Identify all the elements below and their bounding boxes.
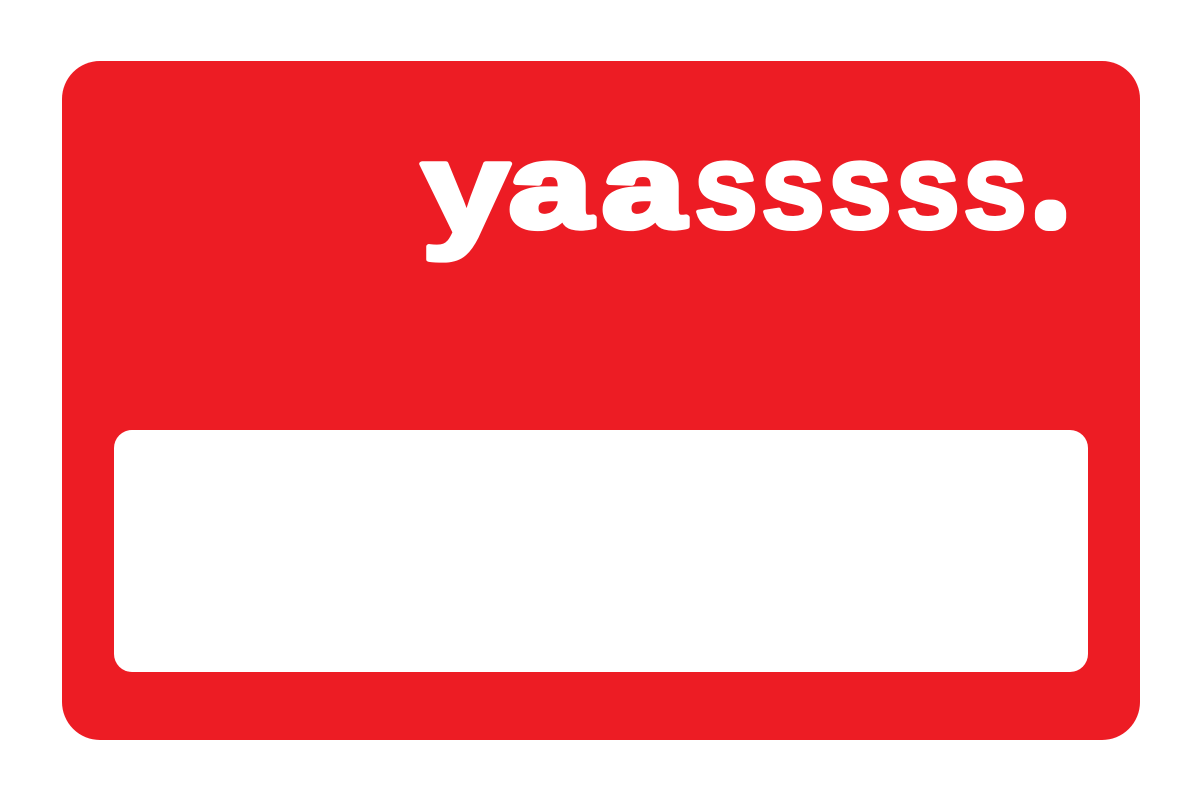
heading: yaasssss.: s: [694, 118, 758, 254]
heading: yaasssss.: s: [896, 118, 960, 254]
heading: yaasssss.: s: [761, 118, 825, 254]
heading: yaasssss.: y: [421, 114, 510, 261]
panel: red card: [62, 61, 1140, 740]
heading: yaasssss.: a: [509, 121, 594, 253]
heading: yaasssss.: s: [828, 118, 892, 254]
heading: yaasssss.: s: [963, 118, 1027, 254]
panel: white blank box: [114, 430, 1088, 672]
heading: yaasssss.: a: [602, 121, 687, 253]
heading: yaasssss.: .: [1046, 192, 1055, 225]
